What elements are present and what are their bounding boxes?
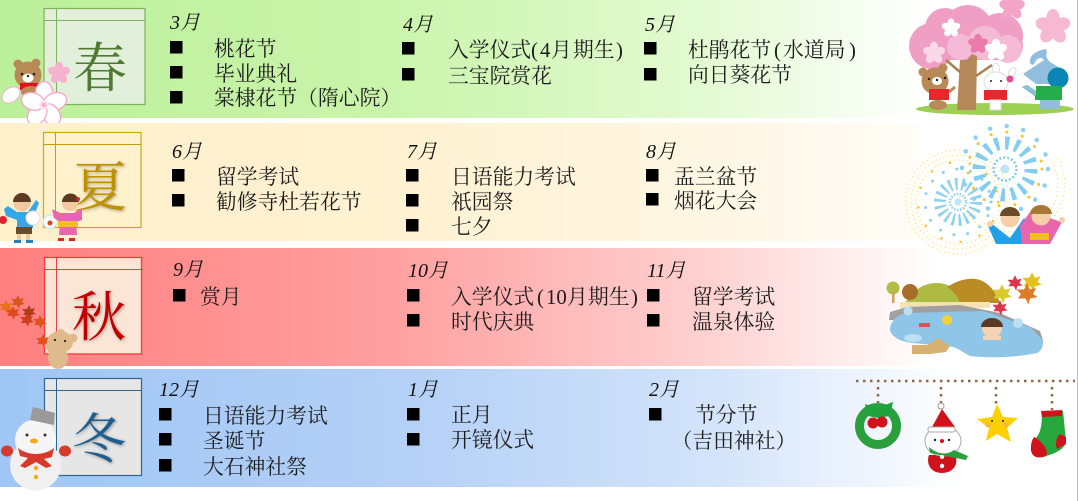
illustration: hanging Christmas ornaments <box>856 381 1075 473</box>
September events: 9月 <box>173 259 204 281</box>
November events: 温泉体验 <box>692 311 775 334</box>
July events: 祇园祭 <box>451 191 514 214</box>
April events <box>402 14 623 88</box>
March events: 棠棣花节（隋心院） <box>214 86 401 110</box>
September events <box>173 259 242 309</box>
May events: 水道局 <box>783 39 845 62</box>
December events: 大石神社祭 <box>203 456 307 479</box>
November events <box>647 260 775 334</box>
February events: （吉田神社） <box>672 430 796 453</box>
June events: 6月 <box>172 141 203 163</box>
January events: 1月 <box>408 379 439 401</box>
icon: children in yukata <box>0 193 82 243</box>
August events <box>646 141 757 213</box>
April events: ( <box>531 39 538 62</box>
icon: bear with maple leaves <box>0 295 78 369</box>
September events: 赏月 <box>200 286 242 309</box>
June events <box>172 141 362 214</box>
March events: 3月 <box>169 12 201 34</box>
June events: 留学考试 <box>216 166 299 189</box>
October events: 10月 <box>408 260 449 282</box>
January events: 正月 <box>451 404 493 427</box>
August events: 烟花大会 <box>674 189 757 213</box>
March events: 毕业典礼 <box>214 63 297 86</box>
July events <box>406 141 576 239</box>
winter kanji box <box>44 378 142 476</box>
illustration: hot spring <box>886 272 1043 357</box>
summer kanji box <box>44 132 141 228</box>
July events: 7月 <box>407 141 438 163</box>
October events <box>407 260 638 334</box>
March events <box>169 12 401 110</box>
summer kanji box: 夏 <box>73 158 127 218</box>
May events: ) <box>849 39 856 62</box>
illustration: cherry tree and animals <box>909 0 1074 115</box>
right edge line <box>1077 0 1078 501</box>
April events: 期生 <box>573 39 615 62</box>
panel: winter <box>0 369 1075 490</box>
April events: 入学仪式 <box>448 39 531 62</box>
November events: 11月 <box>647 260 687 282</box>
panel: autumn <box>0 248 1043 369</box>
December events: 日语能力考试 <box>203 405 328 428</box>
May events: 杜鹃花节 <box>688 39 771 62</box>
October events: 10 <box>546 286 567 309</box>
May events: ( <box>774 39 781 62</box>
February events: 节分节 <box>695 404 757 427</box>
icon: bear on sakura <box>0 58 71 129</box>
February events <box>649 379 796 453</box>
panel: summer <box>0 123 1065 254</box>
October events: 期生 <box>588 286 630 309</box>
February events: 2月 <box>649 379 680 401</box>
October events: ( <box>537 286 544 309</box>
June events: 勧修寺杜若花节 <box>216 190 362 214</box>
spring kanji box: 春 <box>73 39 127 99</box>
October events: ) <box>631 286 638 309</box>
April events: 三宝院赏花 <box>448 64 552 88</box>
October events: 月 <box>567 286 588 309</box>
May events <box>644 14 856 87</box>
autumn kanji box <box>44 258 142 354</box>
panel: spring <box>0 0 1074 129</box>
November events: 留学考试 <box>692 286 775 309</box>
December events: 圣诞节 <box>203 430 265 453</box>
January events: 开镜仪式 <box>451 429 534 452</box>
April events: 4 <box>540 39 551 62</box>
icon: snowman <box>1 407 71 490</box>
May events: 5月 <box>645 14 676 36</box>
January events <box>407 379 534 452</box>
illustration: fireworks and children <box>906 126 1065 254</box>
October events: 入学仪式 <box>451 286 534 309</box>
spring kanji box <box>44 8 145 104</box>
winter kanji box: 冬 <box>72 410 126 470</box>
December events: 12月 <box>159 379 200 401</box>
July events: 七夕 <box>451 216 493 239</box>
August events: 8月 <box>646 141 677 163</box>
March events: 桃花节 <box>214 37 276 61</box>
July events: 日语能力考试 <box>451 166 576 189</box>
April events: 4月 <box>403 14 434 36</box>
April events: 月 <box>551 39 572 62</box>
April events: ) <box>616 39 623 62</box>
May events: 向日葵花节 <box>688 63 792 87</box>
autumn kanji box: 秋 <box>72 288 126 348</box>
August events: 盂兰盆节 <box>674 166 757 189</box>
December events <box>159 379 328 479</box>
October events: 时代庆典 <box>451 311 535 334</box>
